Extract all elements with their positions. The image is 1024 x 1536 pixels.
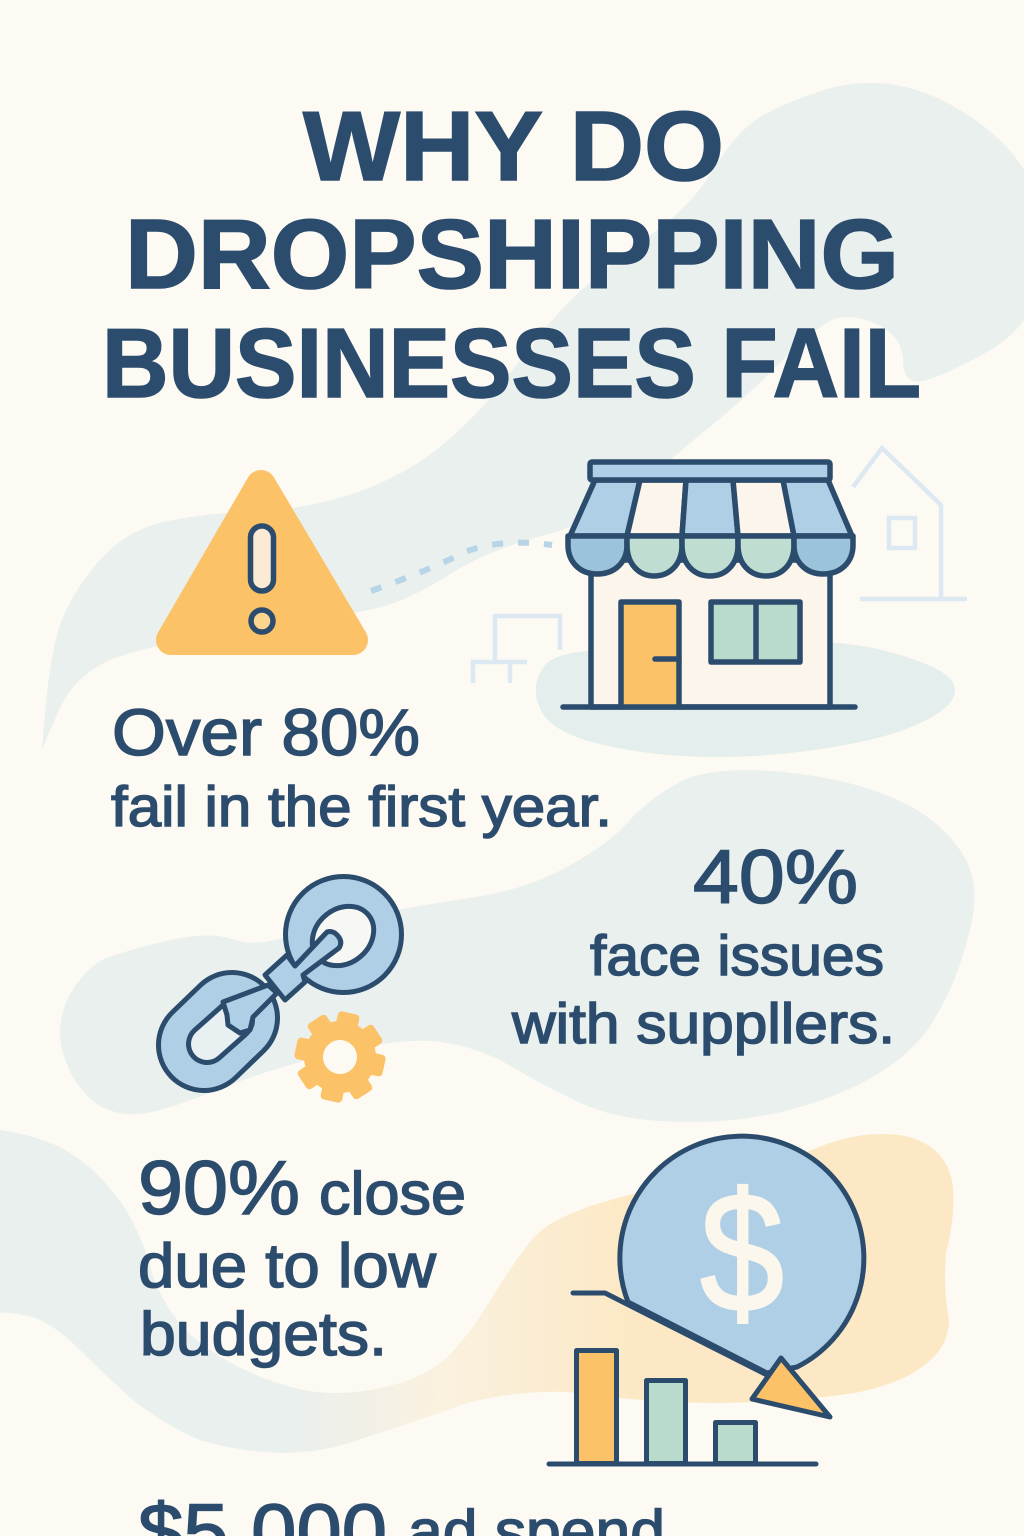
chain connector [265,932,341,1000]
icon: warning triangle [171,485,353,640]
text: 40% face issues: face issues [590,924,884,988]
awning scallops [568,536,853,576]
text: 90% close [138,1146,466,1368]
title: DROPSHIPPING [125,199,899,309]
text: 90% close: budgets. [140,1300,387,1368]
door handle [655,656,679,662]
falling trend line [573,1293,775,1379]
text: over 80% [111,695,612,839]
store wall [591,560,830,707]
awning stripes [570,480,852,536]
store door [621,602,679,707]
icon: faint bench outline [473,616,560,683]
text: 90% close: close [319,1160,466,1227]
lower chain link [204,1018,234,1045]
text: over 80%: fail in the first year. [111,775,612,839]
text: 90% close: due to low [138,1232,436,1301]
ground line [563,704,855,710]
upper chain link [286,876,402,992]
dollar coin [620,1136,864,1373]
icon: falling money and bars [549,1136,864,1464]
text: over 80%: Over 80% [112,695,420,769]
background blob: under store [536,642,955,757]
icon: gear [287,1004,393,1110]
background blob: lower wave fading to yellow [0,1130,953,1453]
icon: faint house outline [853,448,967,599]
dotted connector arrow [371,543,552,591]
chain hook [223,985,277,1033]
arrow head [752,1358,830,1417]
dollar sign: $ [700,1158,784,1348]
text: 90% close: 90% [138,1146,300,1231]
store window [711,602,800,662]
text: $5,000 ad spend [138,1487,665,1536]
text: 40% face issues: with suppllers. [511,992,895,1056]
title: BUSINESSES FAIL [102,308,921,418]
background blob: middle [60,770,974,1122]
title: WHY DO [303,91,724,201]
text: 40% face issues: 40% [693,835,858,920]
icon: broken chain link [204,876,402,1045]
title [102,91,921,418]
text: 40% face issues [511,835,895,1056]
icon: storefront [563,462,855,707]
awning top bar [590,462,830,480]
bar chart [549,1350,816,1464]
background blob: upper sweep [42,83,1024,750]
